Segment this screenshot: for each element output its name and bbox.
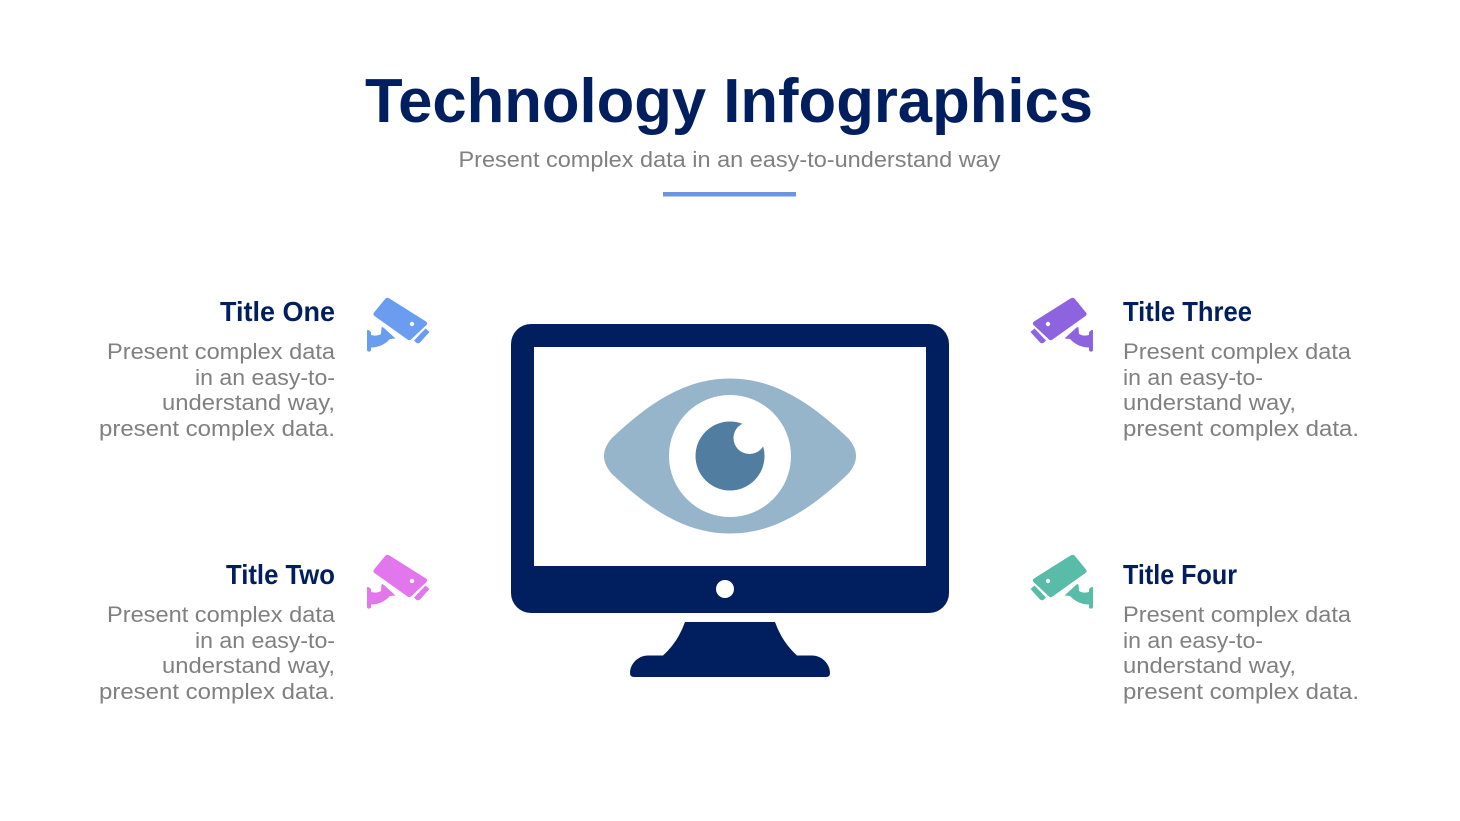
text block: title two: present complex data.: [99, 679, 335, 704]
panel: title four: [1123, 559, 1359, 704]
icon: blue security camera: [367, 298, 430, 352]
subtitle: Present complex data in an easy-to-understand way: [458, 147, 1001, 172]
heading: title three: Title Three: [1123, 296, 1252, 327]
heading: title four: Title Four: [1123, 559, 1237, 590]
text block: title three: Present complex data: [1123, 339, 1352, 364]
text block: title two: in an easy-to-: [195, 628, 335, 653]
monitor: [511, 324, 949, 677]
panel: title one: [99, 296, 336, 441]
text block: title one: present complex data.: [99, 416, 335, 441]
text block: title four: understand way,: [1123, 653, 1296, 678]
monitor screen: [534, 347, 926, 566]
panel: title two: [99, 559, 336, 704]
text block: title four: [1123, 602, 1359, 704]
text block: title one: in an easy-to-: [195, 365, 335, 390]
power button: [716, 580, 734, 598]
monitor body: [511, 324, 949, 613]
icon: pink security camera: [367, 555, 430, 609]
text block: title four: present complex data.: [1123, 679, 1359, 704]
text block: title four: Present complex data: [1123, 602, 1352, 627]
text block: title one: Present complex data: [107, 339, 336, 364]
text block: title three: in an easy-to-: [1123, 365, 1263, 390]
icon: eye: [604, 378, 856, 534]
monitor stand: [630, 622, 830, 677]
icon: purple security camera: [1030, 298, 1093, 352]
text block: title three: understand way,: [1123, 390, 1296, 415]
title: Technology Infographics: [365, 67, 1093, 136]
text block: title two: understand way,: [162, 653, 335, 678]
heading: title two: Title Two: [226, 559, 335, 590]
text block: title four: in an easy-to-: [1123, 628, 1263, 653]
text block: title three: present complex data.: [1123, 416, 1359, 441]
text block: title three: [1123, 339, 1359, 441]
text block: title two: [99, 602, 336, 704]
panel: title three: [1123, 296, 1359, 441]
text block: title one: [99, 339, 336, 441]
text block: title one: understand way,: [162, 390, 335, 415]
heading: title one: Title One: [220, 296, 335, 327]
title underline: [663, 192, 796, 196]
icon: green security camera: [1030, 555, 1093, 609]
text block: title two: Present complex data: [107, 602, 336, 627]
